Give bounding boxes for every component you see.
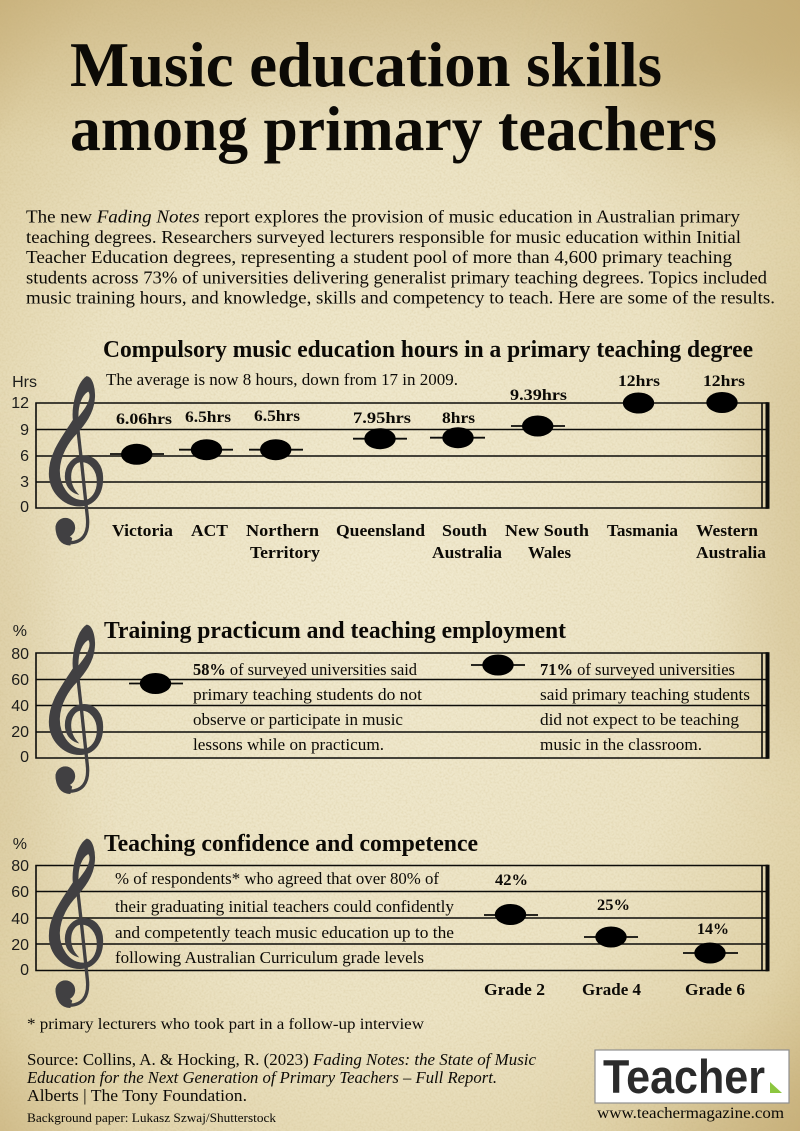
intro text: teaching degrees. Researchers surveyed lecturers responsible for music education within Initial xyxy=(26,227,741,247)
icon: treble clef xyxy=(49,377,103,545)
state labels: Wales xyxy=(528,543,571,562)
note value labels: 6.5hrs xyxy=(254,408,300,425)
y axis labels: hours: 6 xyxy=(20,448,29,465)
y axis labels: percent: 20 xyxy=(11,937,29,954)
y axis labels: percent: % xyxy=(13,623,27,640)
note value labels: 6.06hrs xyxy=(116,411,172,428)
note value labels: 25% xyxy=(597,897,630,914)
state labels: Tasmania xyxy=(607,521,679,540)
y axis labels: hours: 12 xyxy=(11,395,29,412)
state labels: South xyxy=(442,521,488,540)
y axis labels: percent: 80 xyxy=(11,646,29,663)
note value labels: 12hrs xyxy=(703,373,745,390)
intro text: music training hours, and knowledge, skills and competency to teach. Here are some of the results. xyxy=(26,288,775,308)
note value labels: 42% xyxy=(495,872,528,889)
y axis labels: hours: 3 xyxy=(20,474,29,491)
state labels: Australia xyxy=(432,543,503,562)
icon: treble clef xyxy=(49,625,103,793)
text: 58 percent: lessons while on practicum. xyxy=(193,735,384,754)
text: respondents description xyxy=(115,869,455,967)
y axis labels: percent: 40 xyxy=(11,698,29,715)
grade labels: Grade 6 xyxy=(685,980,745,999)
intro text xyxy=(26,206,775,308)
panel: teaching confidence xyxy=(11,831,770,1007)
text: 58 percent: primary teaching students do not xyxy=(193,685,422,704)
text: respondents description: following Australian Curriculum grade levels xyxy=(115,948,424,967)
text: 71 percent: said primary teaching students xyxy=(540,685,750,704)
intro text: The new Fading Notes report explores the provision of music education in Australian primary xyxy=(26,206,740,226)
note: 58 percent xyxy=(129,673,183,694)
note value labels: 6.5hrs xyxy=(185,409,231,426)
note value labels: 8hrs xyxy=(442,410,475,427)
notes: grade levels xyxy=(484,904,738,964)
text: 58 percent xyxy=(193,660,422,754)
note value labels: 12hrs xyxy=(618,373,660,390)
intro text: students across 73% of universities delivering generalist primary teaching degrees. Topics included xyxy=(26,268,767,288)
text: 71 percent: music in the classroom. xyxy=(540,735,702,754)
source text: Education for the Next Generation of Primary Teachers – Full Report. xyxy=(26,1068,497,1087)
y axis labels: percent xyxy=(11,623,29,766)
y axis labels: percent: 60 xyxy=(11,672,29,689)
text: 58 percent: 58% of surveyed universities said xyxy=(193,660,418,679)
notes: hours by state xyxy=(110,392,738,465)
subheading: average hours: The average is now 8 hours, down from 17 in 2009. xyxy=(106,370,458,389)
grade labels xyxy=(484,980,745,999)
state labels: Western xyxy=(696,521,759,540)
y axis labels: percent: 40 xyxy=(11,911,29,928)
state labels: Queensland xyxy=(336,521,426,540)
icon: treble clef xyxy=(49,839,103,1007)
y axis labels: hours: 0 xyxy=(20,499,29,516)
panel: compulsory hours xyxy=(11,337,770,562)
y axis labels: hours: Hrs xyxy=(12,374,37,391)
grade labels: Grade 2 xyxy=(484,980,545,999)
staff lines xyxy=(36,865,770,971)
source text: Source: Collins, A. & Hocking, R. (2023) Fading Notes: the State of Music xyxy=(27,1050,537,1069)
text: 71 percent xyxy=(540,660,750,754)
title: Music education skills xyxy=(70,30,662,100)
note: 71 percent xyxy=(471,654,525,676)
state labels xyxy=(112,521,767,562)
y axis labels: percent: % xyxy=(13,836,27,853)
source text xyxy=(26,1050,537,1105)
y axis labels: percent: 0 xyxy=(20,962,29,979)
text: 58 percent: observe or participate in music xyxy=(193,710,403,729)
panel: training practicum xyxy=(11,618,770,793)
note value labels xyxy=(116,373,745,428)
text: respondents description: their graduating initial teachers could confidently xyxy=(115,897,455,916)
title: among primary teachers xyxy=(70,94,717,164)
text: 71 percent: did not expect to be teaching xyxy=(540,710,739,729)
state labels: Victoria xyxy=(112,521,174,540)
note value labels: 14% xyxy=(697,921,729,938)
text: respondents description: % of respondents* who agreed that over 80% of xyxy=(115,869,440,888)
y axis labels: percent: 60 xyxy=(11,884,29,901)
footnote: * primary lecturers who took part in a follow-up interview xyxy=(27,1016,424,1033)
y axis labels: percent: 20 xyxy=(11,724,29,741)
state labels: New South xyxy=(505,521,590,540)
heading: teaching confidence: Teaching confidence and competence xyxy=(104,831,478,857)
note value labels: 9.39hrs xyxy=(510,387,567,404)
heading: training practicum: Training practicum and teaching employment xyxy=(104,618,566,644)
image credit: Background paper: Lukasz Szwaj/Shutterstock xyxy=(27,1110,277,1125)
y axis labels: percent: 80 xyxy=(11,858,29,875)
note value labels xyxy=(495,872,729,938)
source text: Alberts | The Tony Foundation. xyxy=(27,1086,247,1105)
website url: www.teachermagazine.com xyxy=(597,1105,785,1122)
y axis labels: percent xyxy=(11,836,29,979)
grade labels: Grade 4 xyxy=(582,980,641,999)
title xyxy=(70,30,717,164)
state labels: ACT xyxy=(191,521,229,540)
text: respondents description: and competently teach music education up to the xyxy=(115,923,454,942)
note value labels: 7.95hrs xyxy=(353,410,411,427)
staff lines xyxy=(36,402,770,509)
logo: Teacher: Teacher xyxy=(603,1050,765,1103)
state labels: Northern xyxy=(246,521,320,540)
state labels: Territory xyxy=(250,543,321,562)
y axis labels: percent: 0 xyxy=(20,749,29,766)
staff lines xyxy=(36,652,770,759)
heading: compulsory hours: Compulsory music education hours in a primary teaching degree xyxy=(103,337,753,363)
y axis labels: hours: 9 xyxy=(20,422,29,439)
intro text: Teacher Education degrees, representing a student pool of more than 4,600 primary teaching xyxy=(26,247,732,267)
y axis labels: hours xyxy=(11,374,37,516)
text: 71 percent: 71% of surveyed universities xyxy=(540,660,735,679)
state labels: Australia xyxy=(696,543,767,562)
